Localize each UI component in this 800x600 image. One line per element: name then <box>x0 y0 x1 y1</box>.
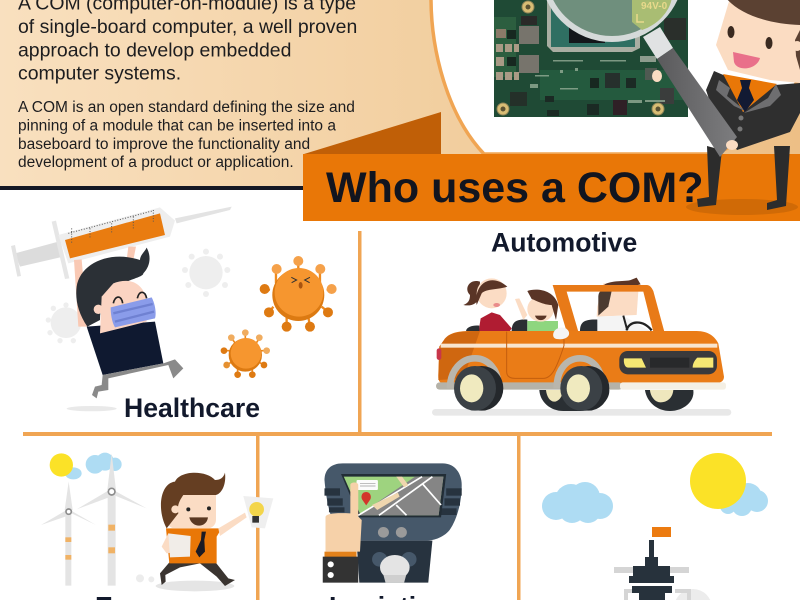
car body <box>436 328 726 390</box>
navigation screen <box>341 474 446 517</box>
running man <box>136 473 247 591</box>
seats <box>466 320 598 331</box>
panel: logistics illustration <box>323 463 462 583</box>
left cloud <box>542 482 613 523</box>
character: hands on handle <box>652 70 738 150</box>
magnifier handle <box>657 48 737 157</box>
syringe <box>11 207 232 279</box>
tie <box>737 80 754 112</box>
banner background <box>303 154 800 221</box>
magnifying glass: 94V-0 <box>641 1 668 12</box>
magnifier lens <box>543 0 681 39</box>
buttons <box>738 116 744 120</box>
body <box>87 322 163 375</box>
board: processor <box>547 0 640 52</box>
face <box>716 0 800 83</box>
buttons <box>378 527 407 538</box>
board: inductors and small parts <box>496 16 686 116</box>
sun <box>690 453 746 509</box>
white spotlight circle <box>431 0 800 154</box>
ground shadow <box>432 409 731 416</box>
panel: intro background <box>0 0 800 190</box>
lapel <box>716 80 781 113</box>
heading: Automotive: Automotive <box>491 228 637 258</box>
wind turbines <box>41 453 147 586</box>
small virus <box>221 329 270 378</box>
legs <box>697 146 790 210</box>
legs <box>92 359 183 398</box>
front wheels <box>450 358 609 411</box>
hand on screen <box>323 482 362 583</box>
ear <box>792 41 800 51</box>
shadow <box>67 406 117 411</box>
shadow <box>686 199 798 215</box>
banner title: Who uses a COM? <box>326 164 703 212</box>
intro text: second paragraph: pinning of a module that can be inserted into a <box>18 118 336 134</box>
shirt <box>723 74 777 112</box>
arm <box>74 247 136 327</box>
sun and clouds <box>50 453 122 479</box>
eyes <box>728 26 734 38</box>
windshield frame and driver <box>553 278 664 332</box>
jacket <box>706 71 800 150</box>
banner: accent fold <box>304 112 441 160</box>
head and hair <box>76 248 150 327</box>
heading: Healthcare: Healthcare <box>124 393 260 423</box>
intro text: second paragraph: A COM is an open standard defining the size and <box>18 99 355 116</box>
right cloud <box>720 483 768 516</box>
board: mounting holes <box>497 1 664 115</box>
intro text: first paragraph: of single-board computer, a well proven <box>18 16 357 38</box>
rear wheels <box>539 390 693 411</box>
panel: healthcare illustration <box>11 207 337 411</box>
panel: automotive illustration <box>432 278 731 416</box>
face mask <box>111 297 156 327</box>
magnifying glass <box>543 0 737 157</box>
character: businessman <box>686 0 800 215</box>
magnifier collar <box>643 27 673 59</box>
ship <box>614 527 712 600</box>
dashboard console <box>324 463 462 541</box>
child <box>515 290 558 332</box>
intro text: first paragraph: computer systems. <box>18 62 181 84</box>
intro text: second paragraph: development of a product or application. <box>18 154 294 171</box>
grey virus background <box>46 249 230 343</box>
divider lines <box>23 231 772 600</box>
intro text: first paragraph: approach to develop embedded <box>18 40 291 62</box>
large virus <box>260 256 337 332</box>
mouth <box>733 52 760 68</box>
woman <box>463 278 512 331</box>
intro text: second paragraph: baseboard to improve the functionality and <box>18 136 310 153</box>
COM module circuit board <box>494 0 688 117</box>
hair <box>726 0 800 70</box>
lightbulb note <box>243 496 273 528</box>
gear knob <box>372 552 417 583</box>
panel: ship illustration <box>542 453 768 600</box>
panel: energy illustration <box>41 453 273 591</box>
